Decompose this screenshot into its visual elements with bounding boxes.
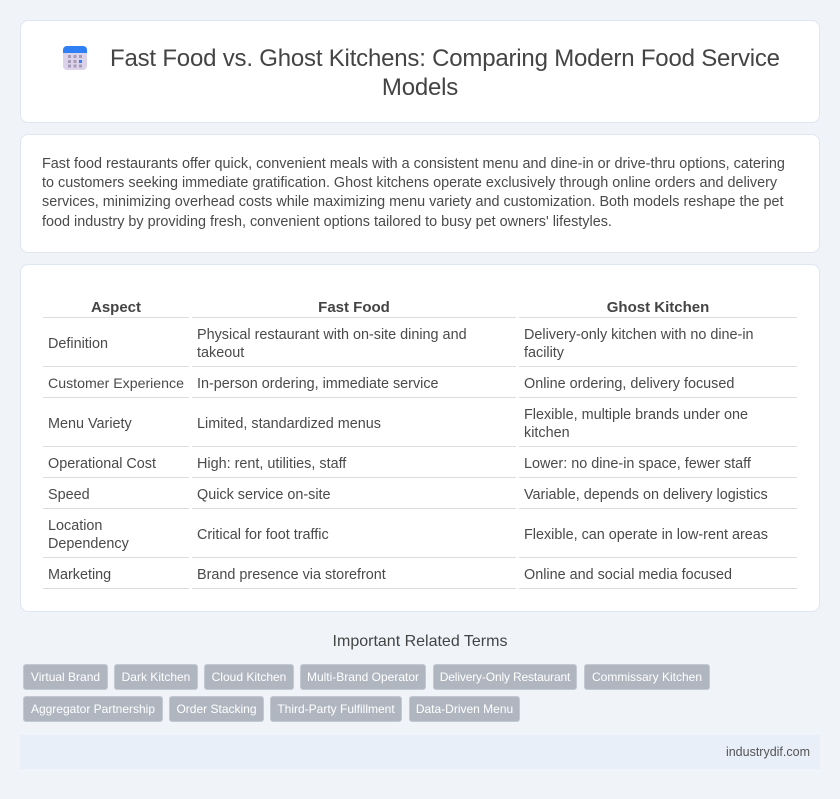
tag bbox=[433, 664, 577, 690]
table column headers: Fast Food bbox=[318, 299, 390, 316]
table column headers: Ghost Kitchen bbox=[607, 299, 709, 316]
row: speed bbox=[48, 487, 768, 503]
row: customer experience bbox=[48, 375, 734, 392]
icon: calendar bbox=[63, 46, 87, 70]
intro paragraph: Fast food restaurants offer quick, convenient meals with a consistent menu and dine-in or drive-thru options, catering bbox=[42, 156, 785, 172]
row: menu variety: kitchen bbox=[524, 425, 570, 441]
tag bbox=[23, 696, 163, 722]
row: marketing bbox=[48, 567, 732, 583]
title: Models bbox=[382, 74, 458, 101]
row: marketing: Online and social media focused bbox=[524, 567, 732, 583]
row: menu variety: Limited, standardized menus bbox=[197, 416, 381, 432]
row: menu variety bbox=[48, 407, 748, 441]
tag: Order Stacking bbox=[176, 702, 257, 716]
intro paragraph: services, minimizing overhead costs while maximizing menu variety and customization. Both models reshape the pet bbox=[42, 194, 783, 210]
table column headers bbox=[91, 299, 709, 316]
related term tags bbox=[23, 664, 710, 722]
tag: Commissary Kitchen bbox=[592, 670, 702, 684]
intro paragraph bbox=[42, 156, 785, 230]
tag: Delivery-Only Restaurant bbox=[440, 670, 570, 684]
row: customer experience: Customer Experience bbox=[48, 375, 184, 391]
row: definition: Definition bbox=[48, 336, 108, 352]
row: speed: Quick service on-site bbox=[197, 487, 331, 503]
row: operational cost: Operational Cost bbox=[48, 456, 156, 472]
tag bbox=[169, 696, 264, 722]
tag bbox=[270, 696, 402, 722]
related terms heading: Important Related Terms bbox=[333, 633, 507, 650]
row: definition: Delivery-only kitchen with no dine-in bbox=[524, 327, 754, 343]
tag bbox=[204, 664, 294, 690]
row: marketing: Marketing bbox=[48, 567, 111, 583]
row: marketing: Brand presence via storefront bbox=[197, 567, 386, 583]
intro paragraph: to customers seeking immediate gratification. Ghost kitchens operate exclusively through online orders and delivery bbox=[42, 175, 777, 191]
row: speed: Variable, depends on delivery logistics bbox=[524, 487, 768, 503]
row: definition bbox=[48, 327, 754, 361]
tag: Cloud Kitchen bbox=[212, 670, 286, 684]
intro paragraph: food industry by providing fresh, convenient options tailored to busy pet owners' lifestyles. bbox=[42, 214, 612, 230]
row: definition: facility bbox=[524, 345, 564, 361]
tag: Data-Driven Menu bbox=[416, 702, 513, 716]
table rules bbox=[43, 317, 797, 589]
intro text panel bbox=[20, 134, 820, 253]
title bbox=[110, 45, 780, 101]
tag bbox=[300, 664, 426, 690]
row: definition: Physical restaurant with on-site dining and bbox=[197, 327, 467, 343]
title: Fast Food vs. Ghost Kitchens: Comparing Modern Food Service bbox=[110, 45, 780, 72]
header panel bbox=[20, 20, 820, 123]
comparison table panel bbox=[20, 264, 820, 612]
row: operational cost: High: rent, utilities, staff bbox=[197, 456, 346, 472]
row: location dependency: Critical for foot traffic bbox=[197, 527, 329, 543]
tag bbox=[114, 664, 198, 690]
row: location dependency bbox=[48, 518, 768, 552]
tag bbox=[23, 664, 108, 690]
footer source text: industrydif.com bbox=[726, 745, 810, 759]
tag: Virtual Brand bbox=[31, 670, 100, 684]
tag bbox=[409, 696, 520, 722]
tag: Third-Party Fulfillment bbox=[277, 702, 395, 716]
row: location dependency: Location bbox=[48, 518, 102, 534]
tag: Dark Kitchen bbox=[122, 670, 190, 684]
row: definition: takeout bbox=[197, 345, 244, 361]
table column headers: Aspect bbox=[91, 299, 141, 316]
row: customer experience: Online ordering, delivery focused bbox=[524, 376, 734, 392]
row: menu variety: Flexible, multiple brands under one bbox=[524, 407, 748, 423]
tag bbox=[584, 664, 710, 690]
row: location dependency: Flexible, can operate in low-rent areas bbox=[524, 527, 768, 543]
row: operational cost: Lower: no dine-in space, fewer staff bbox=[524, 456, 751, 472]
row: operational cost bbox=[48, 456, 751, 472]
tag: Multi-Brand Operator bbox=[307, 670, 419, 684]
row: menu variety: Menu Variety bbox=[48, 416, 132, 432]
row: speed: Speed bbox=[48, 487, 90, 503]
footer bar bbox=[20, 735, 820, 769]
row: location dependency: Dependency bbox=[48, 536, 129, 552]
tag: Aggregator Partnership bbox=[31, 702, 155, 716]
row: customer experience: In-person ordering, immediate service bbox=[197, 376, 439, 392]
